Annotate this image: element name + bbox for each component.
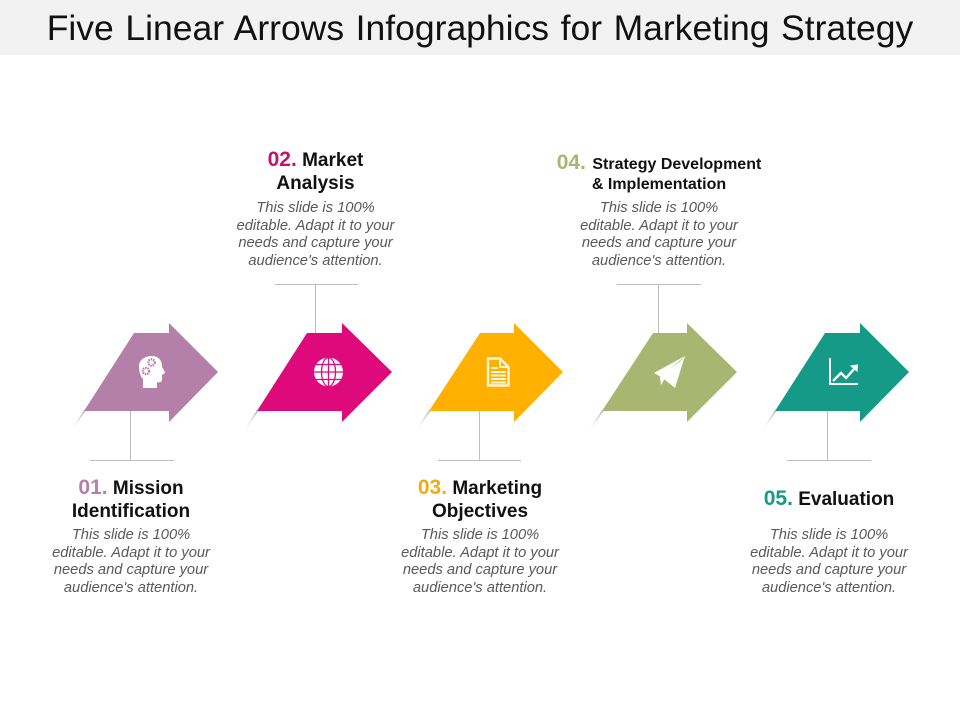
- heading 03: [418, 476, 542, 522]
- heading 02: Analysis: [276, 173, 355, 194]
- icon: globe: [314, 357, 343, 387]
- description 05: [750, 527, 908, 596]
- arrow 03: [416, 323, 563, 431]
- description 01: This slide is 100%: [72, 527, 190, 543]
- heading 01: 01. Mission: [78, 476, 184, 499]
- description 04: This slide is 100%: [600, 200, 718, 216]
- description 04: audience's attention.: [592, 253, 726, 269]
- connector: 05: [787, 411, 871, 460]
- connector: 02: [275, 284, 358, 333]
- text block: 05 Evaluation: [750, 487, 908, 596]
- description 02: editable. Adapt it to your: [237, 218, 394, 234]
- icon: paper plane: [654, 356, 685, 388]
- description 02: needs and capture your: [238, 235, 393, 251]
- text block: 04 Strategy Development & Implementation: [557, 151, 762, 269]
- description 03: audience's attention.: [413, 580, 547, 596]
- description 05: audience's attention.: [762, 580, 896, 596]
- description 01: needs and capture your: [54, 562, 208, 578]
- description 03: editable. Adapt it to your: [401, 545, 559, 561]
- description 04: editable. Adapt it to your: [580, 218, 738, 234]
- description 01: audience's attention.: [64, 580, 198, 596]
- description 02: [237, 200, 395, 269]
- connector: 04: [617, 284, 701, 333]
- heading 02: [268, 148, 364, 194]
- text block: 02 Market Analysis: [237, 148, 395, 269]
- heading 04: 04. Strategy Development: [557, 151, 761, 174]
- description 01: editable. Adapt it to your: [52, 545, 210, 561]
- arrow 04: [589, 323, 737, 431]
- heading 01: Identification: [72, 501, 190, 522]
- icon: document: [488, 358, 508, 386]
- connector: 03: [438, 411, 521, 460]
- description 02: audience's attention.: [248, 253, 383, 269]
- icon: head with gears: [139, 356, 165, 388]
- description 03: needs and capture your: [403, 562, 557, 578]
- arrow 05: [762, 323, 909, 431]
- description 05: needs and capture your: [752, 562, 906, 578]
- heading 02: 02. Market: [268, 148, 363, 171]
- icon: growth chart: [830, 358, 858, 384]
- text block: 01 Mission Identification: [52, 476, 210, 596]
- heading 05: 05. Evaluation: [764, 487, 894, 510]
- description 04: needs and capture your: [582, 235, 736, 251]
- arrow 02: [244, 323, 392, 431]
- heading 04: & Implementation: [592, 176, 726, 193]
- description 05: editable. Adapt it to your: [750, 545, 908, 561]
- heading 04: [557, 151, 762, 193]
- description 04: [580, 200, 738, 269]
- description 05: This slide is 100%: [770, 527, 888, 543]
- description 03: [401, 527, 560, 596]
- title bar: [0, 0, 960, 55]
- text block: 03 Marketing Objectives: [401, 476, 560, 596]
- title: Five Linear Arrows Infographics for Marketing Strategy: [47, 8, 913, 48]
- heading 01: [72, 476, 190, 522]
- heading 03: Objectives: [432, 501, 528, 522]
- connector: 01: [90, 411, 174, 460]
- description 03: This slide is 100%: [421, 527, 539, 543]
- arrow 01: [71, 323, 218, 431]
- heading 03: 03. Marketing: [418, 476, 542, 499]
- description 01: [52, 527, 210, 596]
- description 02: This slide is 100%: [256, 200, 375, 216]
